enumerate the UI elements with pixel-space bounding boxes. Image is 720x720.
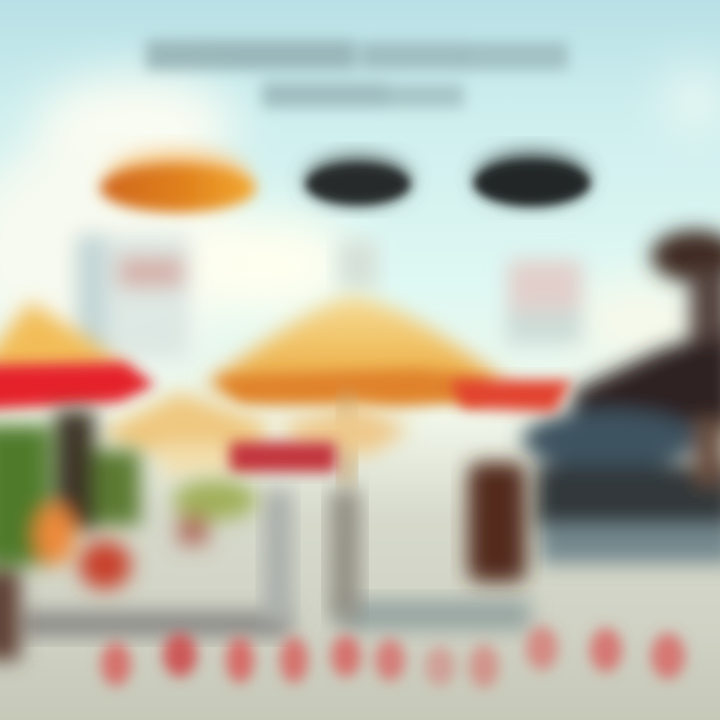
row of red blurred markers [101,626,685,688]
caption placeholder: centre column [338,240,378,290]
red banner and posts [230,442,360,620]
icon: orange umbrella top [100,150,256,212]
title placeholder: illegible blurred heading [146,40,568,108]
pavement strips [20,600,530,636]
icon: black umbrella top, right [474,152,590,205]
background small umbrella [100,392,410,475]
brown post [468,462,526,582]
large centre umbrella [205,296,572,485]
left red and yellow umbrella [0,302,155,410]
caption placeholder: right column [506,260,582,344]
left plants and furniture [0,410,257,660]
right side dark pavilion [522,230,720,563]
caption placeholder: left column [76,235,190,360]
clouds [0,70,719,365]
icon: black umbrella top, centre [306,156,410,204]
